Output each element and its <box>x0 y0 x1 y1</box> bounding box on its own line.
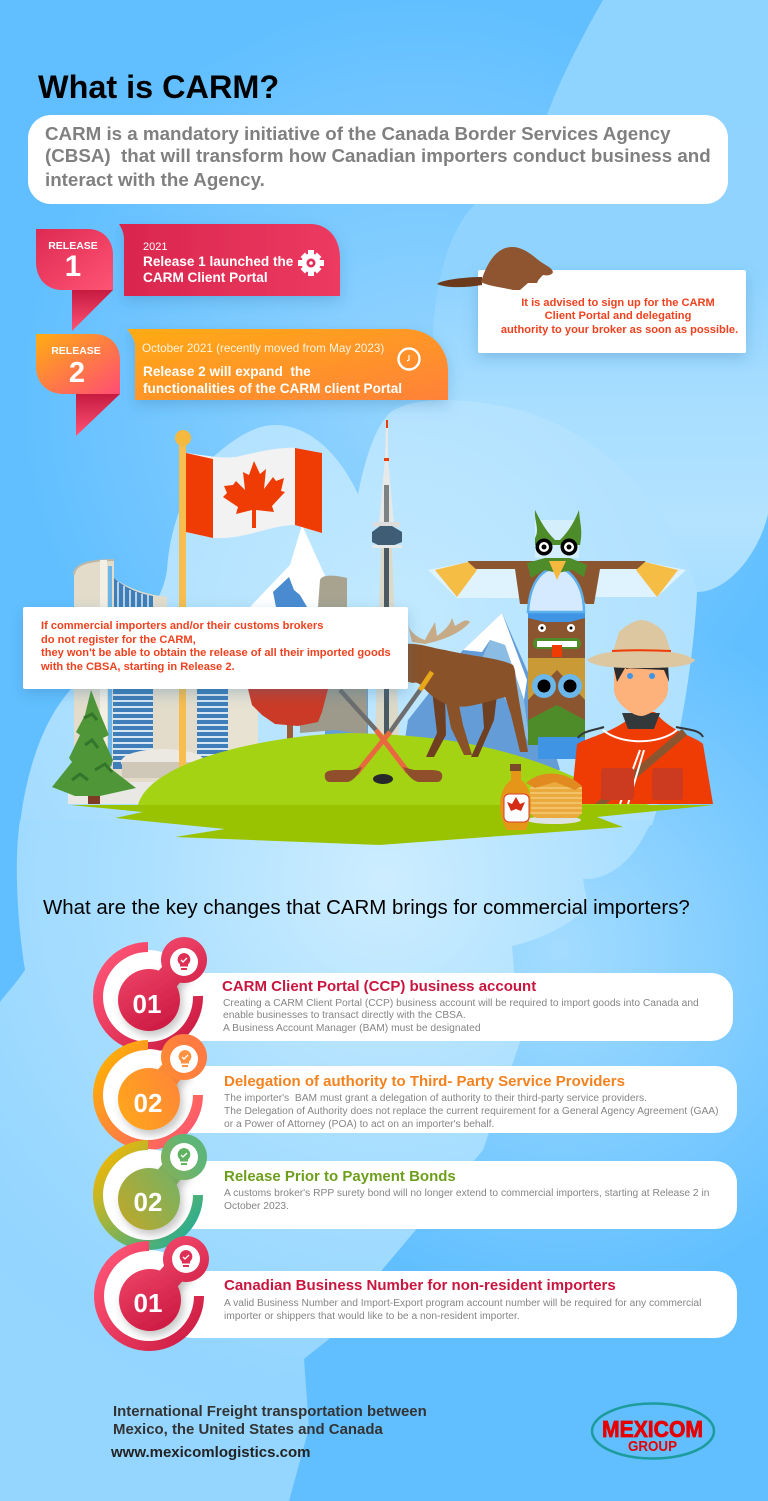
release 1 ribbon tail <box>72 290 113 331</box>
footer text: International Freight transportation between <box>113 1403 427 1420</box>
release 2 banner text: October 2021 (recently moved from May 2023) <box>142 342 384 355</box>
callout: sign up advice <box>478 270 746 353</box>
panel: CARM definition: interact with the Agency. <box>45 169 265 190</box>
item 1 body: Creating a CARM Client Portal (CCP) business account will be required to import goods into Canada and <box>223 998 699 1009</box>
release 2 badge label: RELEASE <box>51 345 101 357</box>
callout: registration warning: with the CBSA, starting in Release 2. <box>40 661 235 673</box>
callout: registration warning: If commercial importers and/or their customs brokers <box>41 620 323 632</box>
CN tower <box>372 420 402 738</box>
item 3 body: October 2023. <box>224 1201 289 1212</box>
Canadian flag <box>186 448 322 538</box>
crossed hockey sticks and puck <box>325 672 442 784</box>
panel: release 2 <box>36 329 448 436</box>
item 3 badge <box>98 1134 207 1245</box>
logo: Mexicom Group: MEXICOM <box>602 1416 703 1442</box>
item 3 badge: 02 <box>134 1187 162 1217</box>
Mountie officer <box>571 620 713 804</box>
release 1 banner text: Release 1 launched the <box>143 254 294 269</box>
heading: key changes: What are the key changes that CARM brings for commercial importers? <box>43 896 690 919</box>
callout: sign up advice: Client Portal and delegating <box>545 310 692 322</box>
flag pole <box>175 430 191 790</box>
item 1: CARM Client Portal <box>98 937 699 1047</box>
panel: release 1 <box>36 224 340 331</box>
moose <box>400 618 528 757</box>
item 1 body: A Business Account Manager (BAM) must be designated <box>223 1023 481 1034</box>
callout: registration warning: they won't be able to obtain the release of all their imported goods <box>41 647 391 659</box>
red maple tree <box>248 689 328 764</box>
footer text: www.mexicomlogistics.com <box>110 1444 311 1461</box>
title: What is CARM? <box>38 69 279 105</box>
item 4 body: A valid Business Number and Import-Export program account number will be required for any commercial <box>224 1298 701 1309</box>
item 1 badge <box>98 937 207 1047</box>
item 2 body: The Delegation of Authority does not replace the current requirement for a General Agency Agreement (GAA) <box>224 1106 719 1117</box>
icon: clock <box>398 348 420 370</box>
callout: sign up advice: It is advised to sign up for the CARM <box>521 297 715 309</box>
item 3 body: A customs broker's RPP surety bond will no longer extend to commercial importers, starting at Release 2 in <box>224 1188 710 1199</box>
icon: beaver <box>437 247 553 290</box>
item 2 badge: 02 <box>134 1088 162 1118</box>
item 2: delegation of authority <box>98 1034 719 1145</box>
release 1 banner text: CARM Client Portal <box>143 270 268 285</box>
city hall <box>68 560 258 804</box>
release 2 banner text: Release 2 will expand the <box>143 364 311 379</box>
mountains <box>250 525 560 770</box>
release 2 ribbon tail <box>76 394 120 436</box>
release 2 badge <box>36 334 120 394</box>
panel: CARM definition <box>0 0 728 204</box>
item 1 body: enable businesses to transact directly with the CBSA. <box>223 1010 466 1021</box>
item 2 body: The importer's BAM must grant a delegation of authority to their third-party service providers. <box>224 1093 647 1104</box>
item 2 body: or a Power of Attorney (POA) to act on an importer's behalf. <box>224 1119 494 1130</box>
release 1 badge <box>36 229 113 290</box>
release 2 banner <box>127 329 448 400</box>
logo: Mexicom Group <box>592 1404 714 1458</box>
callout: registration warning: do not register for the CARM, <box>41 634 196 646</box>
release 2 badge number: 2 <box>69 357 85 389</box>
green hill <box>70 733 714 845</box>
item 4 badge <box>99 1236 209 1346</box>
callout: registration warning <box>23 607 408 689</box>
icon: gear <box>298 250 324 276</box>
illustration: Canada scene <box>52 420 714 845</box>
item 1 badge: 01 <box>133 989 161 1019</box>
item 4 badge: 01 <box>134 1288 162 1318</box>
release 1 badge number: 1 <box>65 250 81 283</box>
panel: CARM definition: CARM is a mandatory initiative of the Canada Border Services Agency <box>45 123 671 144</box>
item 2 badge <box>98 1034 207 1145</box>
pancakes and maple syrup <box>500 764 582 830</box>
totem pole <box>428 510 686 759</box>
release 2 banner text: functionalities of the CARM client Portal <box>143 381 402 396</box>
footer text: Mexico, the United States and Canada <box>113 1421 383 1438</box>
row panels <box>170 973 737 1338</box>
evergreen tree <box>52 690 136 804</box>
release 1 banner <box>119 224 340 296</box>
item 1 heading: CARM Client Portal (CCP) business account <box>222 978 536 995</box>
callout: sign up advice: authority to your broker as soon as possible. <box>501 324 738 336</box>
item 2 heading: Delegation of authority to Third- Party Service Providers <box>224 1073 625 1090</box>
totem wings <box>428 562 686 598</box>
logo: Mexicom Group: GROUP <box>628 1438 677 1455</box>
item 3: release prior to payment bonds <box>98 1134 710 1245</box>
item 4 heading: Canadian Business Number for non-resident importers <box>224 1277 616 1294</box>
release 1 badge label: RELEASE <box>48 240 98 252</box>
item 4: Canadian business number <box>99 1236 701 1346</box>
release 1 banner text: 2021 <box>143 241 167 253</box>
footer text <box>110 1403 427 1461</box>
item 4 body: importer or shippers that would like to be a non-resident importer. <box>224 1311 520 1322</box>
item 3 heading: Release Prior to Payment Bonds <box>224 1168 456 1185</box>
panel: CARM definition: (CBSA) that will transform how Canadian importers conduct business and <box>45 145 711 166</box>
